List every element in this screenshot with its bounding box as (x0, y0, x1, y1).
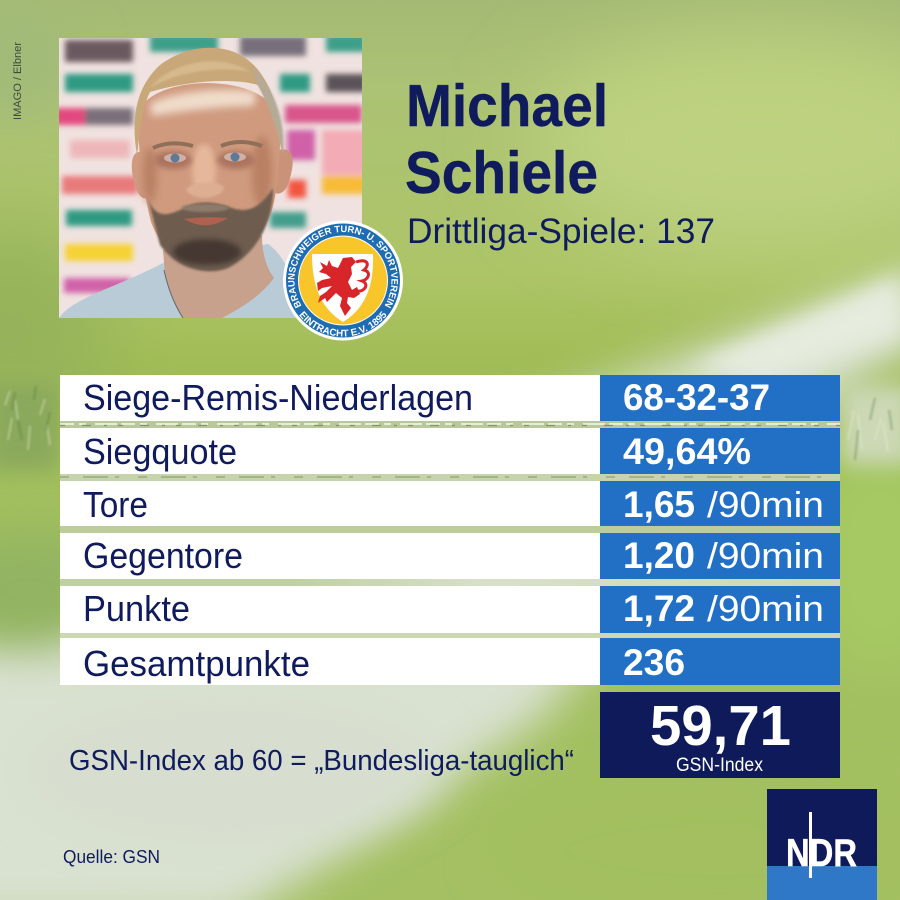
row: wins-draws-losses (60, 375, 840, 421)
eyes (164, 154, 186, 162)
row: win rate (60, 428, 840, 474)
face (139, 83, 280, 240)
neck (163, 235, 274, 318)
forehead highlight (150, 90, 256, 116)
stats table (60, 375, 840, 685)
face shading (252, 136, 272, 208)
crest ring text top: BRAUNSCHWEIGER TURN- U. SPORTVEREIN (288, 226, 398, 308)
row: wins-draws-losses: Siege-Remis-Niederlagen (83, 377, 473, 418)
photo: Michael Schiele (55, 34, 366, 318)
source: Quelle: GSN (63, 846, 160, 867)
GSN index score box: GSN-Index (676, 755, 763, 776)
row: goals against (60, 533, 840, 579)
player name: Schiele (405, 140, 598, 206)
grass detail between rows (5, 386, 892, 638)
NDR logo (767, 789, 877, 900)
brows (153, 143, 193, 148)
row: goals: Tore (83, 484, 148, 525)
player name: Michael (406, 73, 608, 139)
row: win rate: Siegquote (83, 431, 237, 472)
row: goals: 1,65 (623, 484, 695, 525)
hair (135, 48, 283, 155)
row: goals against: Gegentore (83, 535, 243, 576)
row: win rate: 49,64% (623, 431, 751, 472)
row: points: /90min (707, 588, 824, 629)
ears (132, 152, 146, 198)
row: total points: Gesamtpunkte (83, 643, 310, 684)
player name (405, 73, 608, 206)
GSN index score box: 59,71 (650, 694, 791, 758)
row: points (60, 586, 840, 633)
NDR logo: NDR (786, 832, 857, 875)
photo credit: IMAGO / Elbner (12, 42, 24, 120)
shirt (59, 244, 305, 318)
row: goals against: 1,20 (623, 535, 695, 576)
row: wins-draws-losses: 68-32-37 (623, 377, 770, 418)
row: goals: /90min (707, 484, 824, 525)
club crest: Eintracht Braunschweig (283, 220, 403, 340)
row: goals (60, 481, 840, 526)
row: points: Punkte (83, 588, 190, 629)
third-division games: Drittliga-Spiele: 137 (407, 212, 715, 251)
row: total points (60, 638, 840, 685)
crest ring text bottom: EINTRACHT E.V. 1895 (299, 311, 386, 336)
GSN index score box (600, 692, 840, 778)
beard (148, 188, 273, 271)
row: points: 1,72 (623, 588, 695, 629)
crest shield (312, 254, 373, 322)
crest lion (317, 257, 360, 316)
nose (186, 184, 224, 197)
mouth (184, 217, 228, 225)
ad wall background (55, 34, 366, 293)
row: goals against: /90min (707, 535, 824, 576)
row: total points: 236 (623, 642, 685, 683)
GSN index note: GSN-Index ab 60 = „Bundesliga-tauglich“ (69, 745, 574, 777)
